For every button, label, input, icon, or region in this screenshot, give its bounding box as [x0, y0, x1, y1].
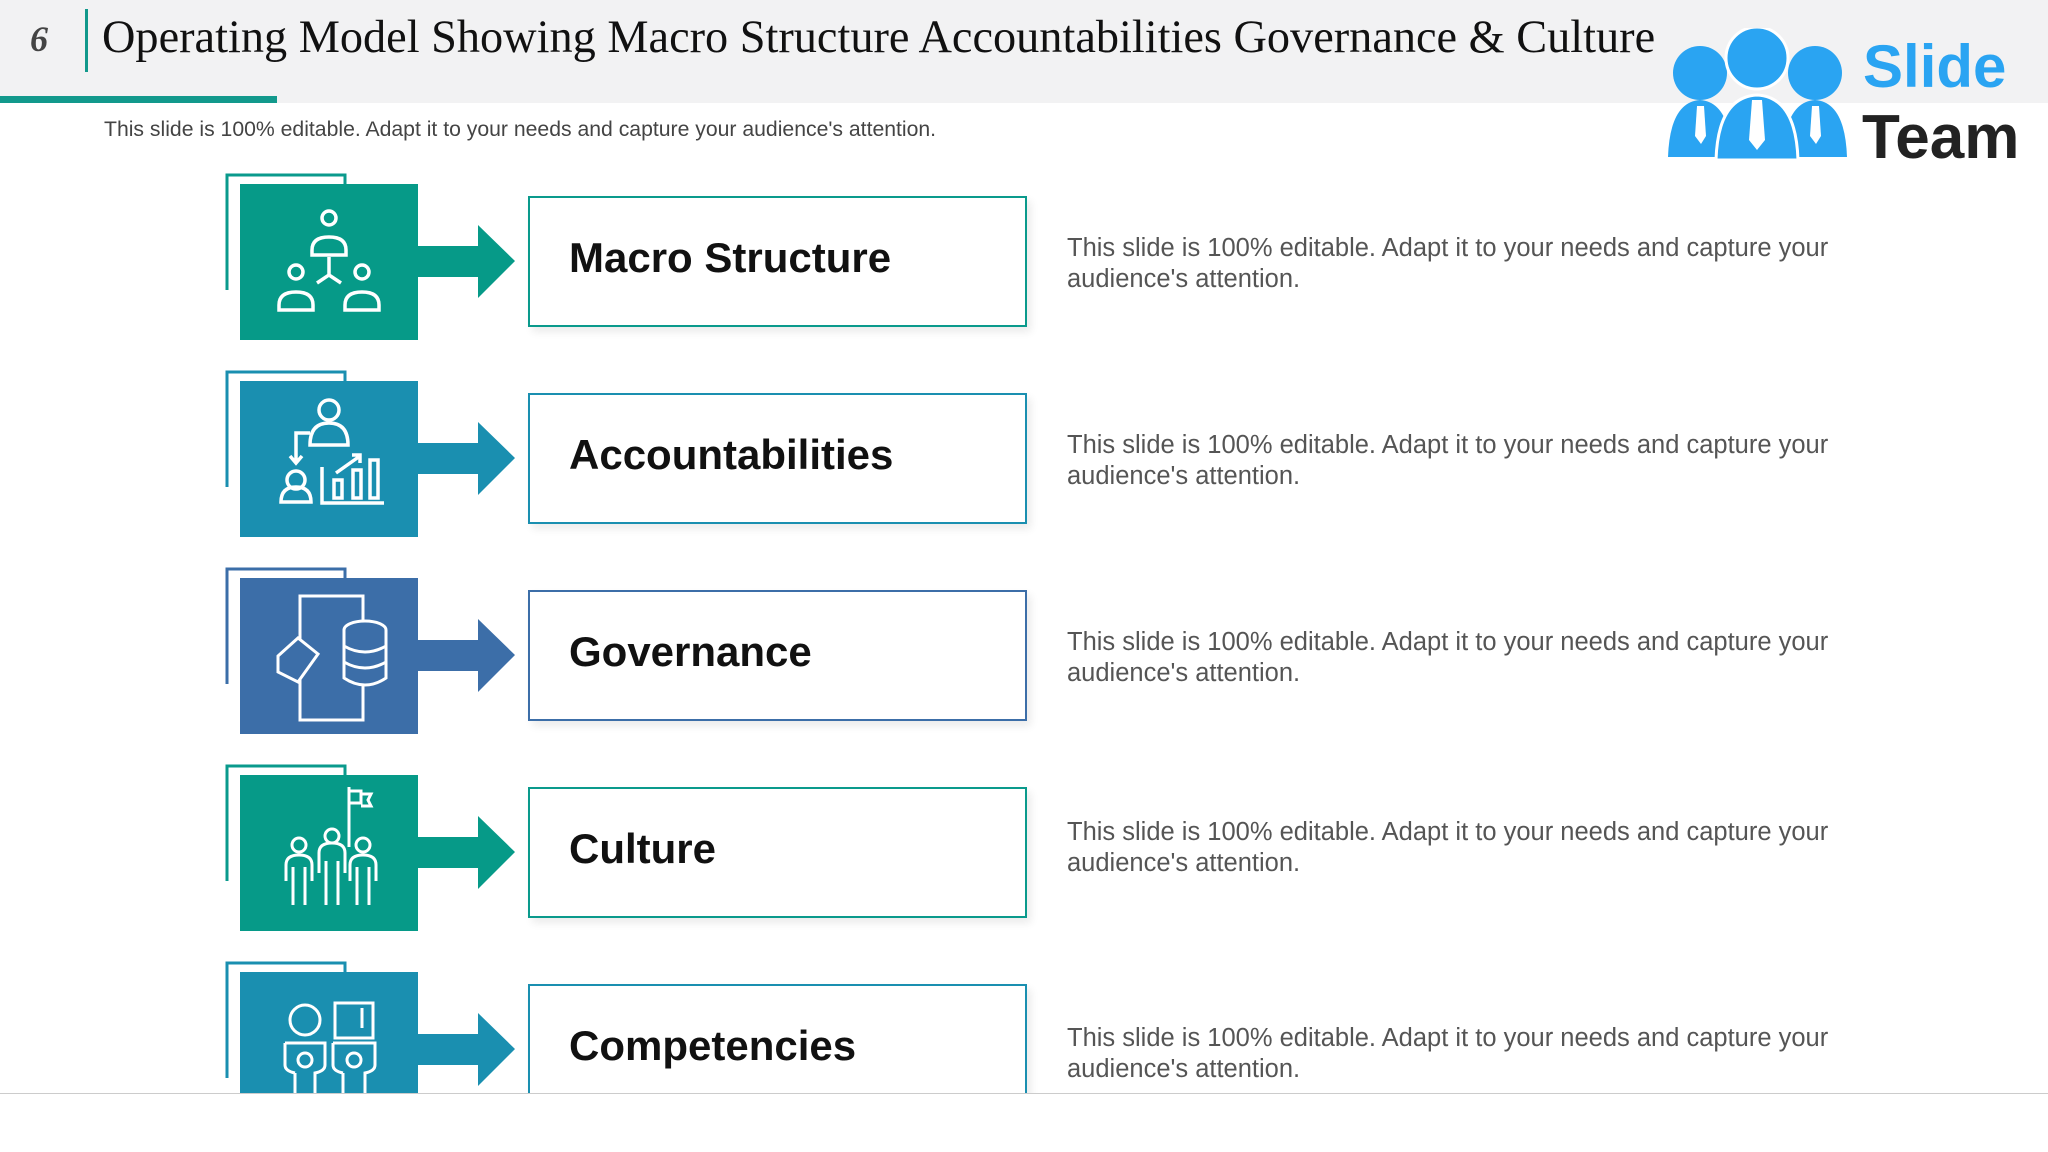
description 2	[1067, 431, 1828, 490]
icon panel 1	[226, 174, 515, 340]
header accent underline	[0, 96, 277, 103]
description 1	[1067, 234, 1828, 293]
title: Operating Model Showing Macro Structure Accountabilities Governance & Culture	[102, 12, 1655, 63]
row 4: Culture	[226, 764, 1828, 931]
description 3: This slide is 100% editable. Adapt it to your needs and capture your	[1067, 628, 1828, 656]
row 3: Governance	[226, 568, 1828, 734]
description 5	[1067, 1024, 1828, 1083]
description 2: This slide is 100% editable. Adapt it to your needs and capture your	[1067, 431, 1828, 459]
row 2: Accountabilities: Accountabilities	[569, 431, 893, 478]
description 4	[1067, 818, 1828, 877]
row 5: Competencies: Competencies	[569, 1022, 856, 1069]
row 2: Accountabilities	[226, 370, 1828, 537]
label box 1	[528, 196, 1027, 327]
label box 2	[528, 393, 1027, 524]
row 3: Governance: Governance	[569, 628, 812, 675]
header band	[0, 0, 2048, 103]
logo: Slide	[1863, 33, 2006, 100]
row 1: Macro Structure	[226, 174, 1828, 340]
description 1: This slide is 100% editable. Adapt it to your needs and capture your	[1067, 234, 1828, 262]
label box 5	[528, 984, 1027, 1115]
label box 4	[528, 787, 1027, 918]
description 3	[1067, 628, 1828, 687]
row 5: Competencies	[226, 962, 1828, 1093]
label box 3	[528, 590, 1027, 721]
description 5: This slide is 100% editable. Adapt it to your needs and capture your	[1067, 1024, 1828, 1052]
logo	[1668, 28, 2019, 168]
description 4: This slide is 100% editable. Adapt it to your needs and capture your	[1067, 818, 1828, 846]
header divider	[85, 9, 88, 72]
description 1: audience's attention.	[1067, 265, 1300, 293]
description 5: audience's attention.	[1067, 1055, 1300, 1083]
subtitle: This slide is 100% editable. Adapt it to your needs and capture your audience's attention.	[104, 118, 936, 141]
description 4: audience's attention.	[1067, 849, 1300, 877]
description 2: audience's attention.	[1067, 462, 1300, 490]
slide number: 6	[30, 19, 48, 59]
row 1: Macro Structure: Macro Structure	[569, 234, 891, 281]
footer rule	[0, 1093, 2048, 1094]
description 3: audience's attention.	[1067, 659, 1300, 687]
row 4: Culture: Culture	[569, 825, 716, 872]
